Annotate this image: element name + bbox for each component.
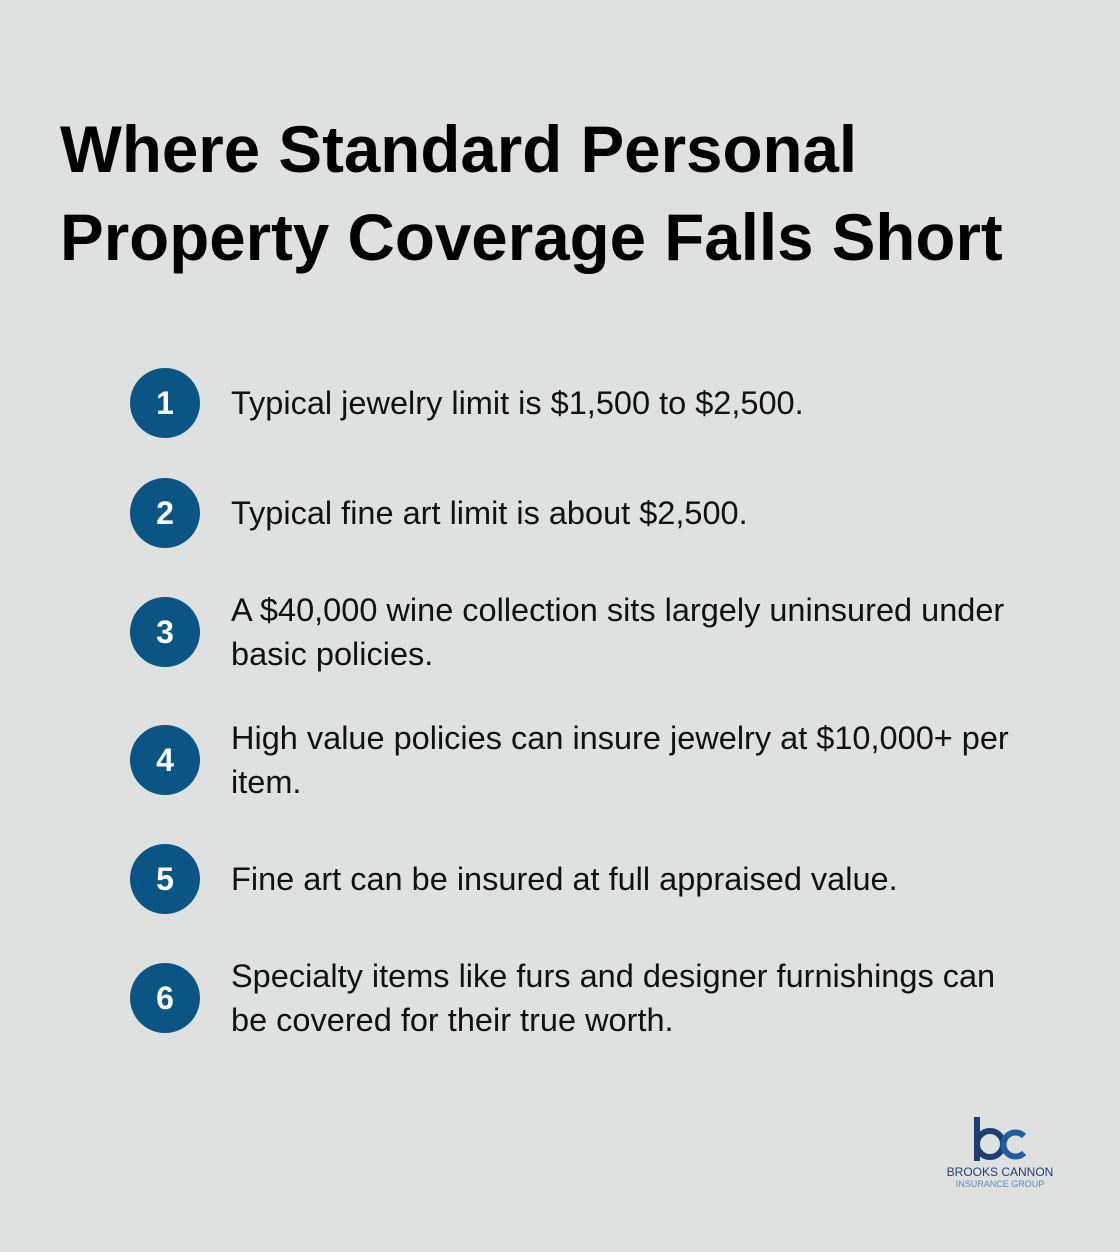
item 4 — [130, 720, 1009, 800]
logo: BROOKS CANNON — [947, 1165, 1053, 1179]
item 2 — [130, 478, 748, 548]
title — [60, 113, 1003, 274]
item 5 — [130, 844, 898, 914]
item 6: Specialty items like furs and designer furnishings can — [231, 958, 995, 994]
logo: INSURANCE GROUP — [956, 1179, 1044, 1189]
item 4: item. — [231, 764, 301, 800]
item 2: 2 — [156, 495, 174, 531]
item 3 — [130, 592, 1004, 672]
item 6: be covered for their true worth. — [231, 1002, 674, 1038]
item 1: 1 — [156, 385, 174, 421]
item 6 — [130, 958, 995, 1038]
item 4: 4 — [156, 742, 174, 778]
logo — [947, 1117, 1053, 1189]
item 3: 3 — [156, 614, 174, 650]
item 3: basic policies. — [231, 636, 433, 672]
item 4: High value policies can insure jewelry at $10,000+ per — [231, 720, 1009, 756]
item 1 — [130, 368, 804, 438]
item 1: Typical jewelry limit is $1,500 to $2,500. — [231, 385, 804, 421]
item 5: Fine art can be insured at full appraised value. — [231, 861, 898, 897]
item 6: 6 — [156, 980, 174, 1016]
title: Property Coverage Falls Short — [60, 201, 1003, 274]
title: Where Standard Personal — [60, 113, 857, 186]
item 5: 5 — [156, 861, 174, 897]
item 3: A $40,000 wine collection sits largely uninsured under — [231, 592, 1004, 628]
item 2: Typical fine art limit is about $2,500. — [231, 495, 748, 531]
